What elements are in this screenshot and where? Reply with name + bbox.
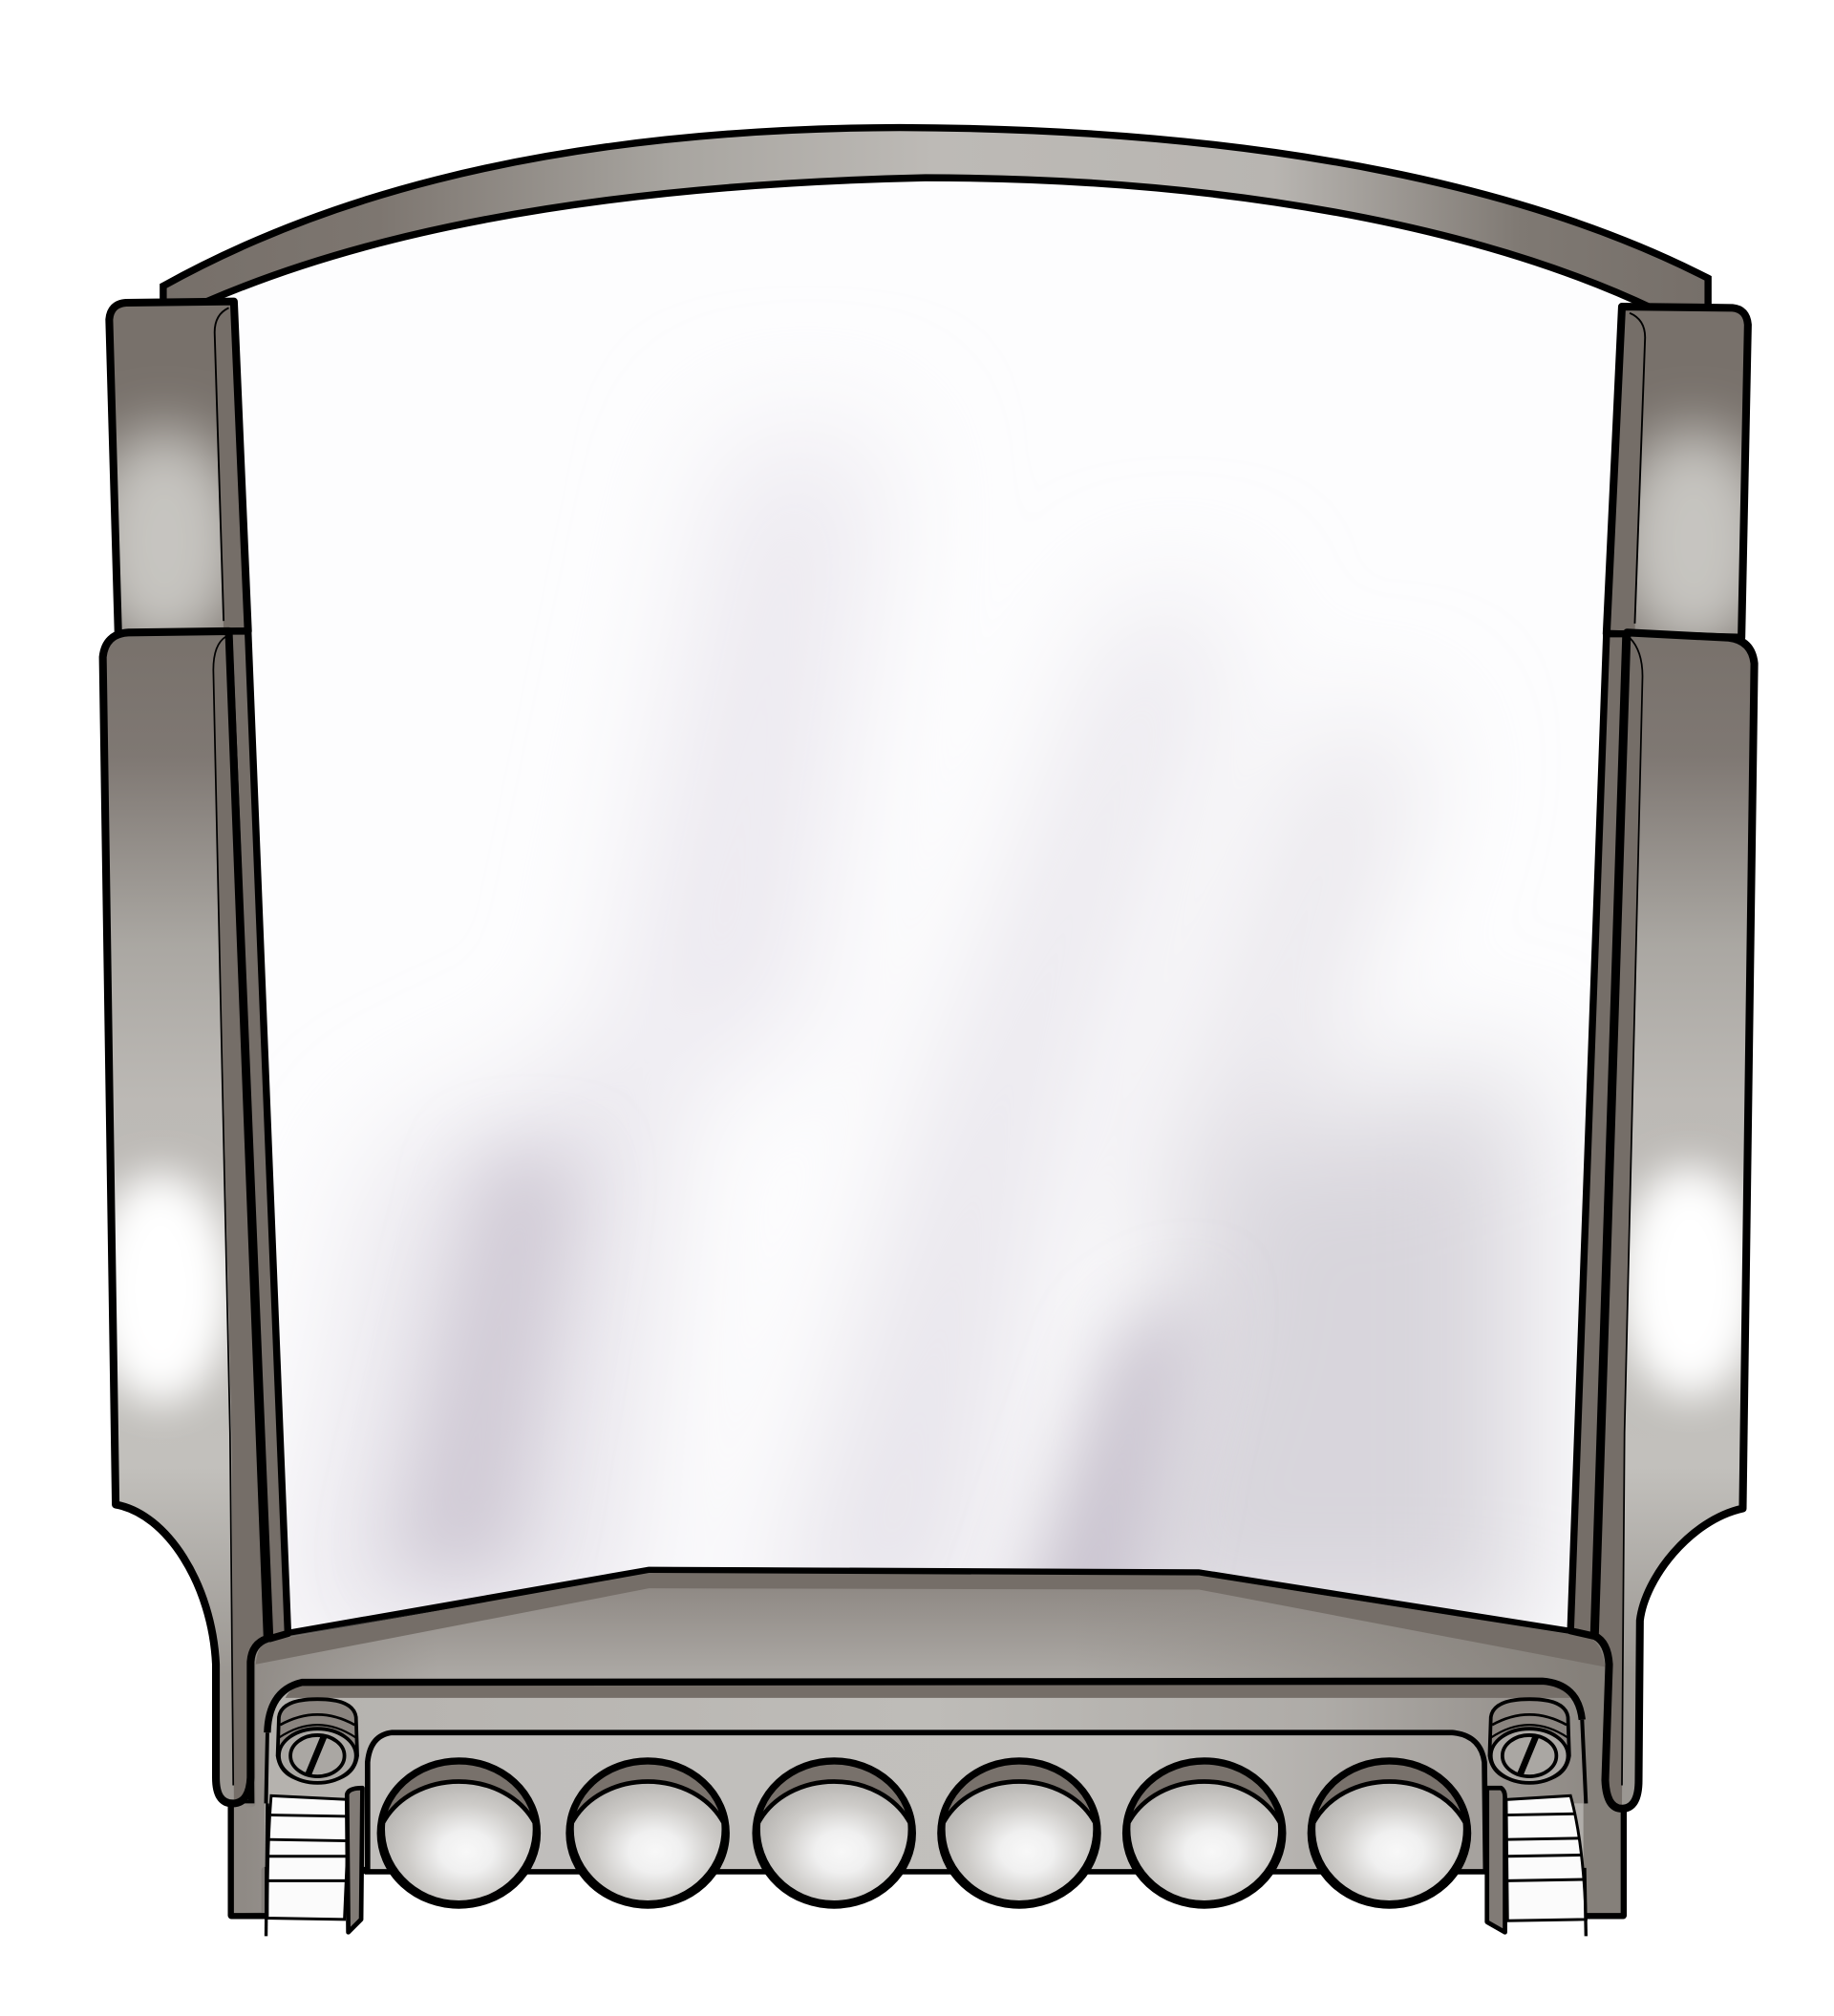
button housing [368, 1732, 1485, 1872]
top arch of the frame [163, 128, 1708, 309]
right frame strip beside glass [1570, 634, 1626, 1636]
button 6 [1311, 1761, 1468, 1905]
button 4 [941, 1761, 1098, 1905]
button 3 [756, 1761, 912, 1905]
right upper side panel [1603, 303, 1752, 640]
button 5 [1126, 1761, 1283, 1905]
left frame strip beside glass [228, 631, 288, 1639]
button 1 [380, 1761, 537, 1905]
right screw [1489, 1699, 1569, 1783]
left ribbed wheel [267, 1788, 362, 1936]
base shelf and legs [231, 1570, 1623, 1916]
right ribbed wheel [1487, 1788, 1586, 1936]
left screw [278, 1699, 357, 1783]
button 2 [569, 1761, 726, 1905]
front plate [267, 1681, 1586, 1872]
glass bottom outline [283, 1570, 1578, 1636]
left upper side panel [105, 298, 252, 633]
right lower side panel [1595, 632, 1762, 1809]
mirror glass [284, 420, 1586, 1629]
left lower side panel [89, 631, 267, 1803]
